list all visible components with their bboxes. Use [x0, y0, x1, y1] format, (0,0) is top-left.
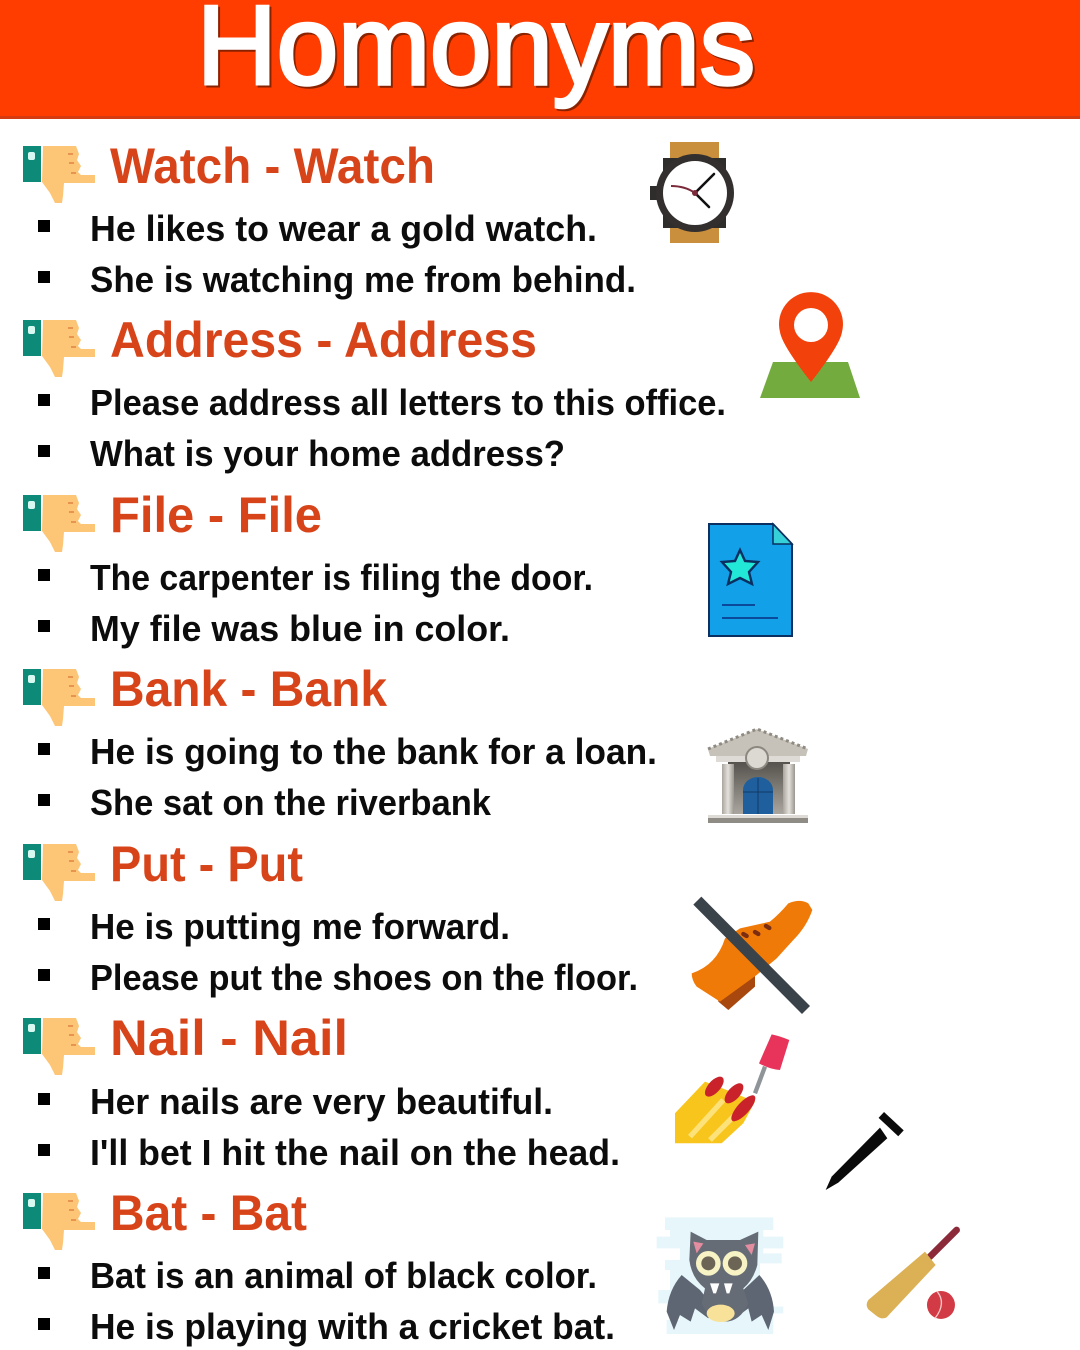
heading: Nail - Nail: Nail - Nail — [110, 1010, 348, 1066]
icon: pointing hand — [23, 495, 95, 552]
icon: map pin — [760, 292, 860, 398]
icon: nail polish hand — [675, 1034, 789, 1143]
heading: Watch - Watch: Watch - Watch — [110, 138, 435, 194]
sentence: My file was blue in color. — [90, 608, 510, 649]
section: Nail — [23, 1010, 620, 1173]
section: Address — [23, 312, 726, 474]
icon: pointing hand — [23, 844, 95, 901]
icon: bank building — [708, 729, 808, 823]
heading: Bank - Bank: Bank - Bank — [110, 661, 387, 717]
section: Put — [23, 836, 638, 998]
section: Bat — [23, 1185, 615, 1347]
sentence: She is watching me from behind. — [90, 259, 636, 300]
sentence: Bat is an animal of black color. — [90, 1255, 597, 1296]
icon: cricket bat and ball — [867, 1230, 957, 1319]
section: Watch — [23, 138, 636, 300]
bullet — [38, 743, 50, 755]
title banner — [0, 0, 1080, 119]
icon: pointing hand — [23, 1018, 95, 1075]
icon: blue document — [709, 524, 792, 636]
sentence: Please address all letters to this office. — [90, 382, 726, 423]
sentence: He likes to wear a gold watch. — [90, 208, 597, 249]
bullet — [38, 569, 50, 581]
heading: File - File: File - File — [110, 487, 322, 543]
icon: bat animal — [657, 1217, 783, 1334]
sentence: He is going to the bank for a loan. — [90, 731, 657, 772]
bullet — [38, 1318, 50, 1330]
heading: Put - Put: Put - Put — [110, 836, 303, 892]
bullet — [38, 445, 50, 457]
sentence: I'll bet I hit the nail on the head. — [90, 1132, 620, 1173]
bullet — [38, 220, 50, 232]
icon: crossed-out shoe — [692, 901, 812, 1010]
bullet — [38, 271, 50, 283]
bullet — [38, 620, 50, 632]
sentence: Her nails are very beautiful. — [90, 1081, 553, 1122]
bullet — [38, 969, 50, 981]
icon: pointing hand — [23, 669, 95, 726]
heading: Bat - Bat: Bat - Bat — [110, 1185, 307, 1241]
bullet — [38, 1093, 50, 1105]
sentence: The carpenter is filing the door. — [90, 557, 593, 598]
bullet — [38, 794, 50, 806]
icon: wristwatch — [650, 142, 734, 243]
icon: metal nail — [826, 1115, 901, 1190]
sentence: Please put the shoes on the floor. — [90, 957, 638, 998]
icon: pointing hand — [23, 146, 95, 203]
bullet — [38, 394, 50, 406]
icon: pointing hand — [23, 1193, 95, 1250]
bullet — [38, 1144, 50, 1156]
bullet — [38, 918, 50, 930]
sentence: He is playing with a cricket bat. — [90, 1306, 615, 1347]
bullet — [38, 1267, 50, 1279]
section: File — [23, 487, 593, 649]
sentence: What is your home address? — [90, 433, 565, 474]
sentence: He is putting me forward. — [90, 906, 510, 947]
icon: pointing hand — [23, 320, 95, 377]
sentence: She sat on the riverbank — [90, 782, 492, 823]
heading: Address - Address: Address - Address — [110, 312, 537, 368]
section: Bank — [23, 661, 657, 823]
